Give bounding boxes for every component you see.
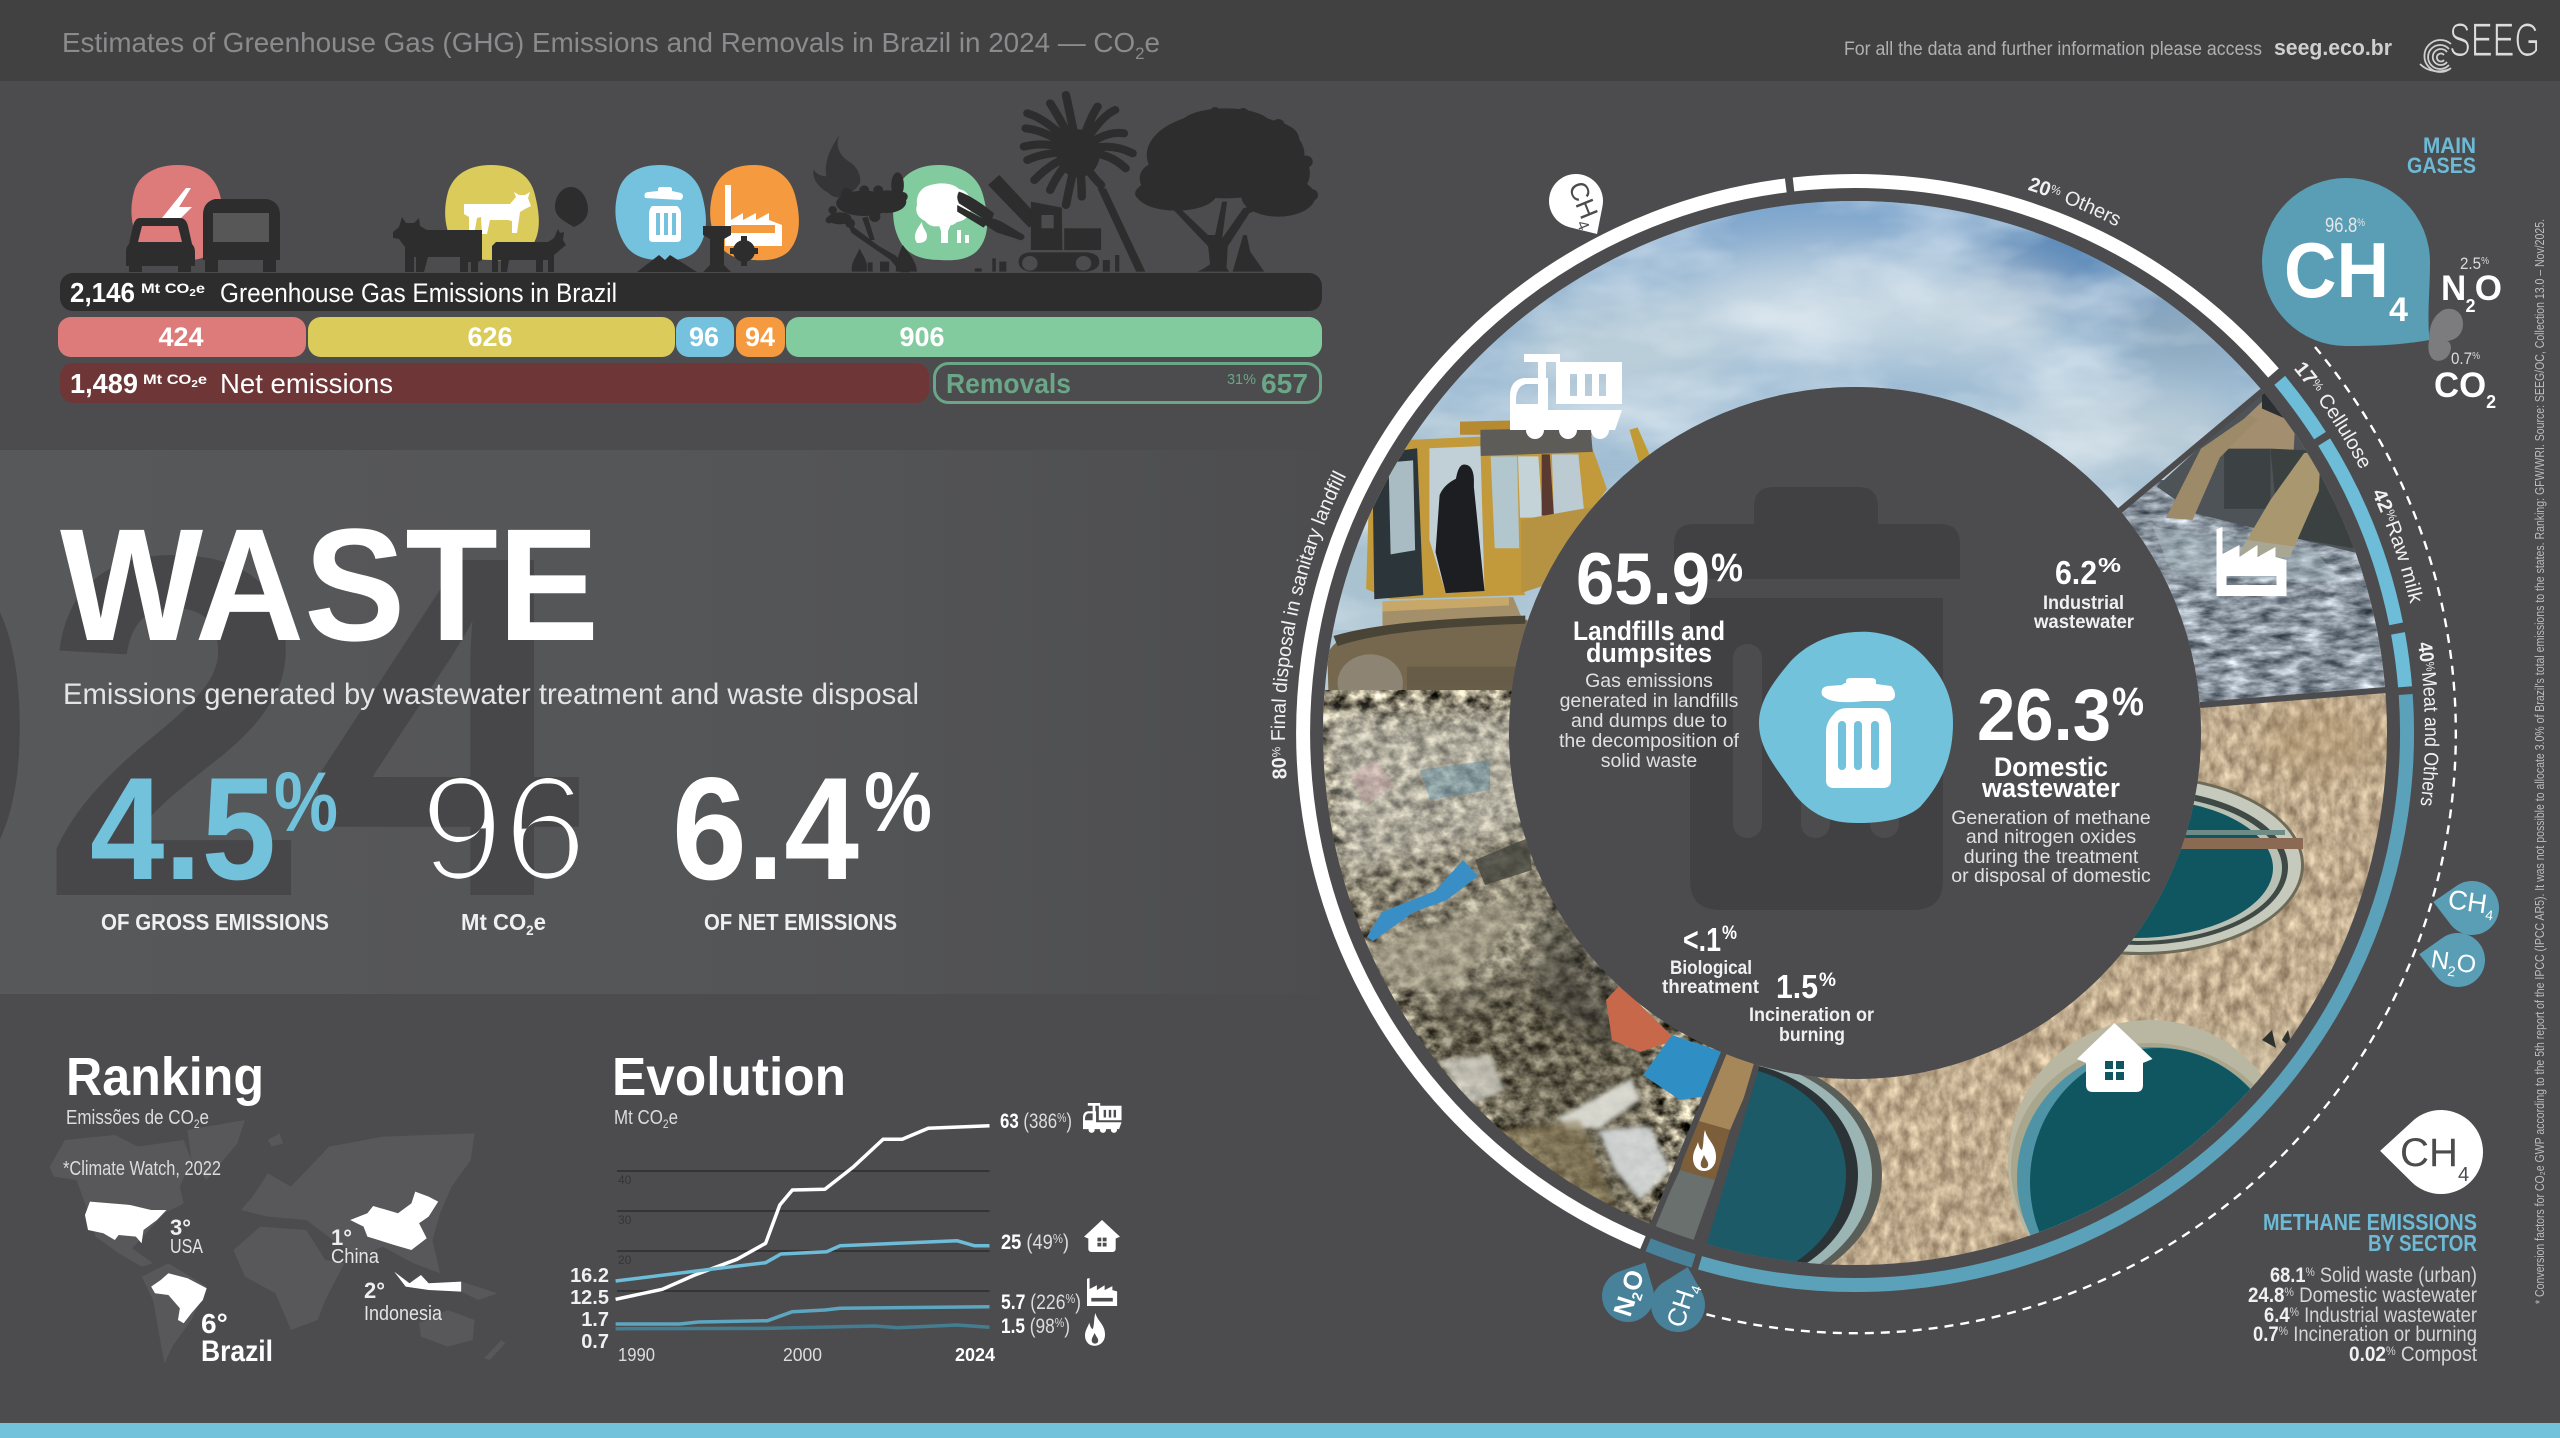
gas: CH4 96.8% <box>2262 178 2430 346</box>
gas: CO2 0.7%: 0.7 <box>2451 349 2475 368</box>
list: methane by sector: Incineration or burning <box>2288 1323 2477 1346</box>
line chart: 2024 <box>955 1345 995 1365</box>
stat: 96 Mt CO2e: 2 <box>526 922 534 938</box>
heading: Ranking: Ranking <box>66 1047 264 1107</box>
icon: flame on photo <box>1693 1130 1716 1171</box>
icon: agriculture blob <box>445 165 539 260</box>
ranking units: Emissões de CO <box>66 1107 216 1129</box>
pond 2 <box>2008 1020 2290 1236</box>
stat: biological <.1% <box>1662 921 1760 998</box>
country: China: 1° <box>331 1225 352 1250</box>
label: 80% final disposal: % <box>1272 747 1280 757</box>
net emissions bar: Mt CO <box>143 371 184 387</box>
stat: domestic 26.3%: and nitrogen oxides <box>1966 826 2136 848</box>
icon: deforestation silhouettes <box>813 95 1318 272</box>
central disc <box>1509 387 2201 1079</box>
photo: burning <box>1654 1053 1756 1240</box>
sector segmented bar: 626 <box>467 322 513 352</box>
icon: flame silhouette <box>813 135 860 197</box>
list: methane by sector: 0.02 <box>2349 1343 2386 1366</box>
gas share blobs <box>2428 309 2463 361</box>
country: Brazil <box>151 1273 273 1368</box>
stat: 6.4% of net emissions <box>672 747 932 935</box>
drop: incineration CH4: CH <box>1660 1286 1700 1331</box>
country: USA: USA <box>170 1236 204 1258</box>
stat: domestic 26.3%: % <box>2112 680 2144 724</box>
bulldozer <box>1327 418 1652 726</box>
drop: wastewater CH4: CH <box>2446 884 2489 919</box>
stat: incineration 1.5%: 1.5 <box>1776 968 1818 1005</box>
series label: industrial 5.7 <box>1001 1278 1117 1314</box>
drop: wastewater N2O: N <box>2429 945 2451 975</box>
sector subtitle: Emissions generated by wastewater treatment and waste disposal <box>63 678 919 711</box>
icon: methane drop: CH <box>2400 1131 2458 1175</box>
label: 80% final disposal: 80 <box>1272 758 1287 778</box>
line chart: 20 <box>618 1253 632 1267</box>
country: Indonesia: Indonesia <box>364 1303 443 1325</box>
photo: industrial wastewater outfall <box>2120 392 2385 706</box>
stat: 6.4% of net emissions: OF NET EMISSIONS <box>704 909 897 935</box>
list: methane by sector <box>2248 1264 2477 1366</box>
pin: CH4 landfill <box>1539 164 1620 249</box>
series label: domestic 25: % <box>1053 1231 1063 1246</box>
ring: share arcs <box>1303 181 2407 1285</box>
line chart: 30 <box>618 1213 632 1227</box>
stat: landfills 65.9%: and dumps due to <box>1571 710 1727 732</box>
label: 20% Others: 20 <box>2028 178 2050 196</box>
heading: methane emissions by sector: BY SECTOR <box>2368 1230 2477 1256</box>
drop: wastewater N2O: O <box>2455 949 2478 979</box>
list: methane by sector: % <box>2386 1344 2396 1358</box>
line chart: 12.5 <box>570 1287 609 1309</box>
stat: domestic 26.3%: wastewater <box>1981 773 2120 803</box>
net emissions bar: 1,489 <box>70 368 138 399</box>
panel: evolution <box>570 1047 1122 1365</box>
drop: incineration N2O: N <box>1607 1293 1642 1320</box>
garbage texture <box>1323 690 1723 1224</box>
stat: domestic 26.3%: during the treatment <box>1964 846 2139 868</box>
gross emissions bar: 2 <box>189 288 196 299</box>
photo ring <box>1300 190 2420 1316</box>
gas: CH4 96.8%: CH <box>2284 226 2389 314</box>
evolution units: e <box>669 1107 678 1129</box>
stat: landfills 65.9% <box>1559 539 1743 772</box>
drop: wastewater N2O <box>2415 928 2489 991</box>
stat: industrial 6.2%: Industrial <box>2043 593 2124 614</box>
icon: palm tree silhouette <box>1024 95 1145 272</box>
heading: methane emissions by sector: METHANE EMISSIONS <box>2263 1209 2477 1235</box>
series label: domestic 25: 25 (49 <box>1001 1231 1058 1254</box>
gas: CH4 96.8%: % <box>2357 217 2365 229</box>
sector segmented bar <box>58 317 1322 357</box>
country: China <box>331 1192 438 1268</box>
stat: 96 Mt CO2e: 96 <box>420 744 587 912</box>
heading: methane emissions by sector <box>2263 1209 2477 1256</box>
ranking units: 2 <box>194 1117 200 1131</box>
list: methane by sector: % <box>2284 1285 2294 1299</box>
icon: bush silhouette <box>826 172 917 272</box>
stat: biological <.1%: Biological <box>1670 958 1752 979</box>
stat: landfills 65.9%: Gas emissions <box>1585 670 1713 692</box>
gross emissions bar: e <box>196 280 205 296</box>
heading: main gases <box>2407 133 2476 178</box>
stat: domestic 26.3%: 26.3 <box>1977 675 2111 756</box>
icon: factory on photo <box>2216 527 2286 596</box>
pond 1 <box>2121 780 2304 955</box>
stat: incineration 1.5%: burning <box>1779 1025 1845 1046</box>
stat: domestic 26.3%: or disposal of domestic <box>1951 865 2151 887</box>
heading: Evolution: Evolution <box>612 1047 846 1107</box>
country: Brazil: 6° <box>201 1308 228 1339</box>
stat: landfills 65.9%: Landfills and <box>1573 616 1725 646</box>
gas: CO2 0.7%: CO <box>2434 366 2486 405</box>
stat: landfills 65.9%: solid waste <box>1601 750 1697 772</box>
stat: industrial 6.2% <box>2033 554 2135 633</box>
list: methane by sector: Industrial wastewater <box>2299 1304 2477 1327</box>
label: 17% Cellulose: 17 <box>2294 362 2318 382</box>
gas: N2O 2.5%: 2 <box>2466 296 2476 316</box>
series label: domestic 25 <box>1001 1220 1120 1254</box>
list: methane by sector: 68.1 <box>2270 1264 2306 1287</box>
heading: main gases: MAIN <box>2423 133 2476 158</box>
removals bar: 31% <box>1227 371 1256 388</box>
heading: main gases: GASES <box>2407 153 2476 178</box>
list: methane by sector: Solid waste (urban) <box>2315 1264 2477 1287</box>
gross emissions bar <box>60 273 1322 311</box>
pond 3 <box>1704 1065 1882 1264</box>
gross emissions bar: 2,146 <box>70 277 135 308</box>
stat: 4.5% of gross emissions: % <box>274 755 338 849</box>
label: 42% Raw milk: % <box>2386 510 2397 521</box>
drop: incineration N2O: O <box>1615 1266 1650 1295</box>
series label: domestic 25: ) <box>1063 1231 1069 1254</box>
wedge dividers <box>1653 391 2386 1243</box>
drop: incineration CH4: 4 <box>1687 1283 1705 1296</box>
drop: wastewater CH4 <box>2429 875 2503 939</box>
stat: incineration 1.5%: Incineration or <box>1749 1005 1875 1026</box>
stat: incineration 1.5%: % <box>1819 970 1836 991</box>
line chart: 16.2 <box>570 1265 609 1287</box>
drop: wastewater N2O: 2 <box>2447 963 2457 980</box>
ring labels <box>1270 178 2440 806</box>
series label: industrial 5.7: ) <box>1075 1291 1081 1314</box>
stat: 6.4% of net emissions: % <box>864 755 932 849</box>
country: China: China <box>331 1246 380 1268</box>
stat: landfills 65.9%: % <box>1711 546 1743 590</box>
drop: incineration N2O <box>1593 1251 1668 1331</box>
stat: industrial 6.2%: wastewater <box>2033 612 2135 633</box>
header title: Estimates of Greenhouse Gas (GHG) Emissions and Removals in Brazil in 2024 — CO <box>62 27 1142 58</box>
evolution units: 2 <box>663 1117 669 1131</box>
sector segmented bar: 906 <box>899 322 945 352</box>
sector segmented bar: 96 <box>689 322 719 352</box>
gas: N2O 2.5%: O <box>2475 269 2502 308</box>
country: USA <box>85 1202 204 1258</box>
stat: landfills 65.9%: the decomposition of <box>1559 730 1740 752</box>
label: 80% final disposal: Final disposal in sanitary landfill <box>1270 470 1346 740</box>
photo: landfill, sky and bulldozer <box>1300 190 2400 1290</box>
country: Brazil: Brazil <box>201 1335 273 1368</box>
icon: car and bus silhouettes <box>126 199 280 272</box>
stat: 96 Mt CO2e: Mt CO <box>461 909 529 935</box>
label: 40% Meat and Others: % <box>2426 662 2435 672</box>
net emissions bar: 2 <box>191 379 198 390</box>
gas: N2O 2.5%: % <box>2481 256 2489 267</box>
label: 42% Raw milk: 42 <box>2374 490 2392 513</box>
header access note: For all the data and further information please access <box>1844 39 2262 60</box>
line chart: 40 <box>618 1173 632 1187</box>
line chart: 2000 <box>783 1345 822 1365</box>
stat: incineration 1.5% <box>1749 968 1875 1046</box>
stat: domestic 26.3%: Domestic <box>1994 752 2108 782</box>
sector segmented bar: 424 <box>158 322 204 352</box>
dashed gas arc <box>1705 347 2456 1333</box>
SEEG logo <box>2420 13 2540 72</box>
removals bar: Removals <box>946 368 1071 399</box>
gas: CO2 0.7%: % <box>2472 351 2480 362</box>
drop: incineration N2O: 2 <box>1628 1290 1646 1303</box>
icon: central waste blob <box>1759 632 1953 823</box>
gas: N2O 2.5%: N <box>2441 269 2466 308</box>
line chart: 0.7 <box>581 1331 609 1353</box>
icon: cattle silhouettes <box>393 187 588 272</box>
photo: domestic wastewater ponds <box>1704 693 2387 1265</box>
sector segmented bar: 94 <box>745 322 775 352</box>
country: Indonesia <box>364 1272 461 1325</box>
series label: landfills 63: % <box>1057 1110 1067 1125</box>
icon: excavator silhouette <box>957 175 1119 272</box>
list: methane by sector: % <box>2306 1265 2315 1279</box>
panel: ranking <box>50 1047 505 1368</box>
icon: large tree silhouette <box>1135 107 1318 272</box>
series label: industrial 5.7: % <box>1065 1291 1076 1306</box>
stat: 6.4% of net emissions: 6.4 <box>672 747 859 910</box>
line chart: 1.7 <box>581 1309 609 1331</box>
drop: wastewater CH4: 4 <box>2484 906 2495 923</box>
list: methane by sector: Compost <box>2396 1343 2477 1366</box>
ranking units: e <box>200 1107 209 1129</box>
stat: landfills 65.9%: 65.9 <box>1576 539 1710 620</box>
removals bar: 657 <box>1261 368 1308 399</box>
series label: incineration 1.5: ) <box>1064 1315 1070 1338</box>
icon: waste blob <box>615 165 706 260</box>
list: methane by sector: 0.7 <box>2253 1323 2279 1346</box>
gas: CH4 96.8%: 96.8 <box>2325 214 2366 237</box>
line chart: 1990 <box>618 1345 655 1365</box>
header url: seeg.eco.br <box>2274 35 2392 60</box>
icon: truck on photo <box>1510 354 1622 439</box>
header title: 2 <box>1135 44 1145 63</box>
list: methane by sector: % <box>2290 1305 2299 1319</box>
list: methane by sector: 6.4 <box>2264 1304 2290 1327</box>
label: 42% Raw milk: Raw milk <box>2386 520 2422 604</box>
stat: biological <.1%: <.1 <box>1683 921 1721 958</box>
series label: incineration 1.5: 1.5 (98 <box>1001 1315 1061 1338</box>
series label: incineration 1.5: % <box>1055 1315 1065 1330</box>
pin: CH4 landfill: 4 <box>1573 218 1592 233</box>
country: USA: 3° <box>170 1215 191 1240</box>
series label: landfills 63 <box>1000 1103 1122 1133</box>
gas: CO2 0.7%: 2 <box>2486 392 2496 412</box>
line chart <box>570 1126 995 1365</box>
stat: industrial 6.2%: 6.2 <box>2055 554 2097 591</box>
world map <box>50 1120 505 1363</box>
series label: industrial 5.7: 5.7 (226 <box>1001 1291 1073 1314</box>
heading: WASTE: WASTE <box>60 495 599 674</box>
net emissions bar: Net emissions <box>220 368 393 399</box>
label: 40% Meat and Others: 40 <box>2418 642 2434 662</box>
icon: land use blob <box>893 165 987 260</box>
net emissions bar <box>60 363 929 403</box>
stat: 4.5% of gross emissions: OF GROSS EMISSIONS <box>101 909 329 935</box>
icon: methane drop <box>2379 1109 2484 1195</box>
silhouette illustration row <box>126 95 1318 272</box>
stat: landfills 65.9%: generated in landfills <box>1560 690 1739 712</box>
label: 20% Others: % <box>2052 184 2060 195</box>
pin: CH4 landfill: CH <box>1562 177 1604 223</box>
series label: incineration 1.5 <box>1001 1313 1105 1346</box>
gross emissions bar: Mt CO <box>141 280 182 296</box>
stat: industrial 6.2%: % <box>2098 555 2121 577</box>
label: 17% Cellulose: % <box>2312 379 2324 391</box>
ranking source: *Climate Watch, 2022 <box>63 1158 221 1180</box>
icon: energy blob <box>131 165 224 260</box>
series label: landfills 63: 63 (386 <box>1000 1110 1067 1133</box>
stat: 4.5% of gross emissions: 4.5 <box>90 747 276 910</box>
header title: e <box>1145 27 1160 58</box>
side footnote: * Conversion factors for CO₂e GWP according to the 5th report of the IPCC (IPCC AR5). It was not possible to allocate 3.0% of Brazil's total emissions to the states. Ranking: GFW/WRI. Source: SEEG/OC, Collection 13.0 – Nov/2025. <box>2533 219 2547 1304</box>
stat: domestic 26.3% <box>1951 675 2151 887</box>
icon: pyramids, pillar and gear silhouettes <box>637 226 758 272</box>
gross emissions bar: Greenhouse Gas Emissions in Brazil <box>220 278 617 308</box>
stat: domestic 26.3%: Generation of methane <box>1951 807 2151 829</box>
label: 17% Cellulose: Cellulose <box>2320 394 2368 468</box>
gas: N2O 2.5%: 2.5 <box>2460 254 2484 273</box>
list: methane by sector: Domestic wastewater <box>2294 1284 2477 1307</box>
icon: methane drop: 4 <box>2458 1164 2469 1186</box>
gas: CH4 96.8%: 4 <box>2389 291 2408 329</box>
label: 20% Others: Others <box>2066 192 2120 226</box>
stat: 96 Mt CO2e: e <box>534 909 546 935</box>
list: methane by sector: 24.8 <box>2248 1284 2285 1307</box>
net emissions bar: e <box>198 371 207 387</box>
icon: house on photo <box>2077 1023 2152 1092</box>
stat: biological <.1%: threatment <box>1662 977 1760 998</box>
evolution units: Mt CO <box>614 1107 672 1129</box>
gas: CO2 0.7% <box>2434 349 2496 412</box>
stat: biological <.1%: % <box>1722 923 1737 944</box>
country: Indonesia: 2° <box>364 1278 385 1303</box>
icon: large background bin <box>1674 487 1960 910</box>
removals bar <box>934 364 1320 402</box>
stat: landfills 65.9%: dumpsites <box>1586 638 1712 668</box>
list: methane by sector: % <box>2279 1324 2288 1338</box>
drop: incineration CH4 <box>1645 1260 1714 1338</box>
icon: industry blob <box>710 165 799 260</box>
series label: landfills 63: ) <box>1066 1110 1072 1133</box>
gas: N2O 2.5% <box>2441 254 2502 316</box>
label: 40% Meat and Others: Meat and Others <box>2420 672 2440 806</box>
